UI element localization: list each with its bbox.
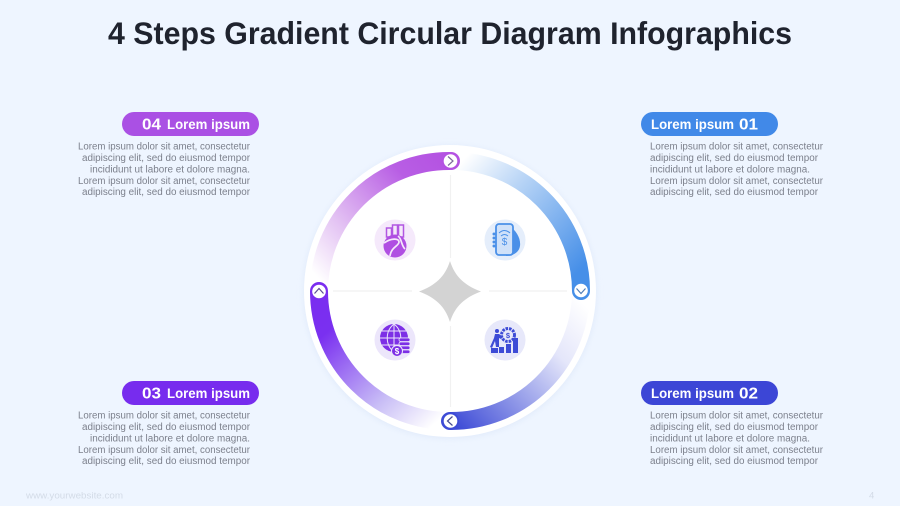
panel: step 01 text block xyxy=(641,112,824,198)
icon: growth chart with gear xyxy=(484,320,526,360)
body text: step 02: Lorem ipsum dolor sit amet, consectetur xyxy=(650,445,824,456)
pill: step 02: Lorem ipsum xyxy=(651,386,734,401)
arrow handle: top xyxy=(442,152,460,170)
pill: step 02: 02 xyxy=(739,386,758,402)
pill: step 03: 03 xyxy=(142,386,161,402)
body text: step 04: Lorem ipsum dolor sit amet, consectetur xyxy=(78,176,251,187)
pill: step 01: Lorem ipsum xyxy=(651,117,734,132)
body text: step 02: Lorem ipsum dolor sit amet, consectetur xyxy=(650,410,824,422)
body text: step 04: adipiscing elit, sed do eiusmod tempor xyxy=(82,187,251,198)
arrow handle: right xyxy=(572,282,590,300)
pill: step 03 xyxy=(122,381,259,405)
body text: step 03: adipiscing elit, sed do eiusmod tempor xyxy=(82,456,251,467)
icon: globe with coins xyxy=(374,320,416,360)
arc: step 04 xyxy=(319,161,450,291)
body text: step 01: incididunt ut labore et dolore magna. xyxy=(650,164,810,176)
pill: step 01: 01 xyxy=(739,116,758,134)
body text: step 02: adipiscing elit, sed do eiusmod tempor xyxy=(650,456,819,467)
pill: step 01 xyxy=(641,112,778,136)
arrow handle: left xyxy=(310,282,328,300)
body text: step 03 xyxy=(78,410,251,467)
arc: step 02 xyxy=(450,291,581,421)
body text: step 02: adipiscing elit, sed do eiusmod tempor xyxy=(650,422,819,433)
body text: step 03: incididunt ut labore et dolore magna. xyxy=(90,434,250,444)
pill: step 04: Lorem ipsum xyxy=(167,117,250,132)
body text: step 04: Lorem ipsum dolor sit amet, consectetur xyxy=(78,142,251,152)
footer: website: www.yourwebsite.com xyxy=(25,490,123,502)
arc: step 01 xyxy=(450,161,581,291)
icon: phone payment in hand: $ xyxy=(502,237,508,248)
pill: step 04: 04 xyxy=(142,116,161,134)
arrow handle: bottom xyxy=(441,412,459,430)
body text: step 01: adipiscing elit, sed do eiusmod tempor xyxy=(650,153,819,164)
body text: step 03: Lorem ipsum dolor sit amet, consectetur xyxy=(78,445,251,456)
body text: step 01: Lorem ipsum dolor sit amet, consectetur xyxy=(650,176,824,187)
body text: step 02 xyxy=(650,410,824,467)
panel: step 02 text block xyxy=(641,381,824,467)
body text: step 01: Lorem ipsum dolor sit amet, consectetur xyxy=(650,142,824,152)
title: 4 Steps Gradient Circular Diagram Infographics xyxy=(108,15,792,51)
pill: step 04 xyxy=(122,112,259,136)
body text: step 02: incididunt ut labore et dolore magna. xyxy=(650,434,810,444)
body text: step 01 xyxy=(650,142,824,198)
body text: step 04 xyxy=(78,142,251,198)
body text: step 03: Lorem ipsum dolor sit amet, consectetur xyxy=(78,410,251,422)
body text: step 04: adipiscing elit, sed do eiusmod tempor xyxy=(82,153,251,164)
center star xyxy=(419,261,481,322)
body text: step 03: adipiscing elit, sed do eiusmod tempor xyxy=(82,422,251,433)
pill: step 02 xyxy=(641,381,778,405)
icon: city on globe xyxy=(374,220,416,260)
footer: page number: 4 xyxy=(869,490,874,502)
body text: step 04: incididunt ut labore et dolore magna. xyxy=(90,164,250,176)
body text: step 01: adipiscing elit, sed do eiusmod tempor xyxy=(650,187,819,198)
circular diagram xyxy=(303,145,597,439)
icon: phone payment in hand xyxy=(484,220,526,260)
panel: step 04 text block xyxy=(78,112,259,198)
pill: step 03: Lorem ipsum xyxy=(167,386,250,401)
arc: step 03 xyxy=(319,291,450,421)
panel: step 03 text block xyxy=(78,381,259,467)
icon: globe with coins: $ xyxy=(395,347,400,356)
icon: growth chart with gear: $ xyxy=(506,331,511,340)
